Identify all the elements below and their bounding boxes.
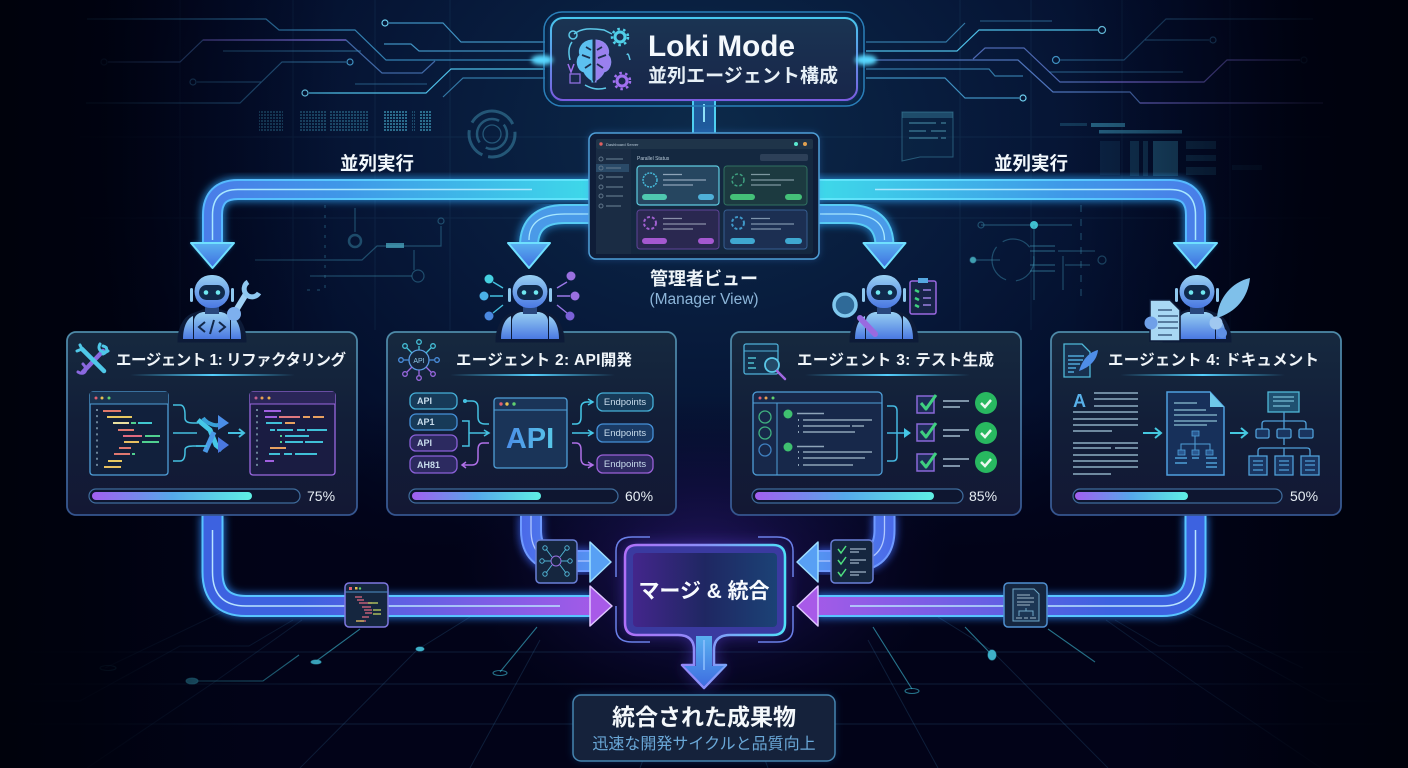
progress bar 50%: 50% — [1290, 488, 1318, 504]
pipe: agent 4 to merge — [797, 515, 1196, 626]
progress bar 75% — [89, 488, 335, 504]
panel: agent 2 — [387, 332, 676, 515]
arrow — [1230, 428, 1247, 438]
header panel — [531, 12, 877, 106]
refactor arrows — [173, 405, 244, 461]
source text lines: A — [1073, 391, 1086, 411]
arrow — [1143, 428, 1161, 438]
API central window: API — [506, 423, 554, 455]
endpoint arrows — [572, 399, 593, 468]
handoff icon: API network — [536, 540, 577, 583]
manager view english label: (Manager View) — [649, 291, 759, 308]
merge label: マージ & 統合 — [638, 580, 770, 603]
handoff icon: checklist — [831, 540, 873, 583]
label: parallel run left: 並列実行 — [340, 153, 414, 174]
icon: API hub — [399, 340, 439, 380]
robot: agent 1 — [179, 275, 259, 341]
card: cyan — [637, 166, 719, 205]
manager view panel — [589, 133, 819, 259]
icon: API hub: API — [413, 358, 425, 365]
document — [1167, 392, 1224, 475]
card: blue — [724, 210, 807, 249]
title: エージェント 3: テスト生成 — [797, 350, 994, 369]
test window — [753, 392, 882, 475]
circuit traces: left — [86, 19, 545, 103]
progress bar 60% — [409, 488, 653, 504]
merge box — [616, 537, 793, 688]
robot: agent 2 — [480, 272, 580, 341]
title: エージェント 1: リファクタリング — [116, 350, 346, 369]
result subtitle: 迅速な開発サイクルと品質向上 — [592, 735, 816, 753]
manager view panel: Parallel Status — [637, 156, 670, 162]
decorative data blocks — [259, 111, 1262, 176]
icon: crossed tools — [77, 344, 108, 373]
title: エージェント 4: ドキュメント — [1108, 352, 1319, 369]
endpoint pills — [597, 393, 653, 473]
connector: header to manager view — [693, 100, 715, 136]
card: purple — [637, 210, 719, 249]
progress bar 50% — [1073, 488, 1318, 504]
endpoint pills: Endpoints — [604, 459, 646, 470]
pipe: agent 3 to merge — [797, 515, 884, 582]
source text lines — [1073, 391, 1138, 474]
API inputs: API — [417, 438, 432, 448]
title text: Loki Mode — [648, 30, 795, 63]
icon: brain and gears — [568, 29, 630, 89]
API inputs — [410, 393, 457, 473]
arrow: parallel run to agent 4 — [810, 190, 1217, 268]
label: parallel run right: 並列実行 — [994, 153, 1068, 174]
panel: agent 3 — [731, 332, 1021, 515]
code window: after — [250, 392, 335, 475]
panel: agent 1 — [67, 332, 357, 515]
progress bar 85%: 85% — [969, 488, 997, 504]
result heading: 統合された成果物 — [612, 704, 796, 730]
title: エージェント 2: API開発 — [456, 351, 632, 369]
progress bar 85% — [752, 488, 997, 504]
panel: agent 4 — [1051, 332, 1341, 515]
code window: before — [90, 392, 168, 475]
arrow: manager view to agent 2 — [508, 214, 600, 268]
robot: agent 4 — [1144, 275, 1250, 341]
API inputs: AP1 — [417, 417, 435, 427]
pipe: agent 1 to merge — [212, 515, 612, 626]
handoff icon: document — [1004, 583, 1047, 627]
arrow: manager view to agent 3 — [810, 214, 906, 268]
manager view panel: Dashboard Server — [606, 142, 639, 147]
API input arrows — [462, 399, 489, 468]
bracket arrow — [887, 406, 904, 461]
endpoint pills: Endpoints — [604, 428, 646, 439]
progress bar 60%: 60% — [625, 488, 653, 504]
API central window — [494, 398, 567, 468]
subtitle text: 並列エージェント構成 — [648, 64, 838, 87]
manager view label: 管理者ビュー — [650, 268, 758, 289]
test checks — [917, 392, 997, 473]
icon: document and quill — [1064, 344, 1098, 377]
arrow: parallel run to agent 1 — [191, 190, 600, 268]
result box — [573, 695, 835, 761]
card: green — [724, 166, 807, 205]
API inputs: AH81 — [417, 460, 440, 470]
progress bar 75%: 75% — [307, 488, 335, 504]
circuit traces: right — [866, 19, 1323, 103]
icon: test search — [744, 344, 785, 379]
API inputs: API — [417, 396, 432, 406]
document tree — [1249, 392, 1319, 475]
arrow head — [904, 428, 911, 438]
handoff icon: code — [345, 583, 388, 627]
endpoint pills: Endpoints — [604, 397, 646, 408]
lower mid circuit decoration — [255, 205, 1106, 300]
robot: agent 3 — [834, 275, 936, 341]
floor grid and traces — [0, 613, 1408, 768]
pipe: agent 2 to merge — [531, 515, 611, 582]
